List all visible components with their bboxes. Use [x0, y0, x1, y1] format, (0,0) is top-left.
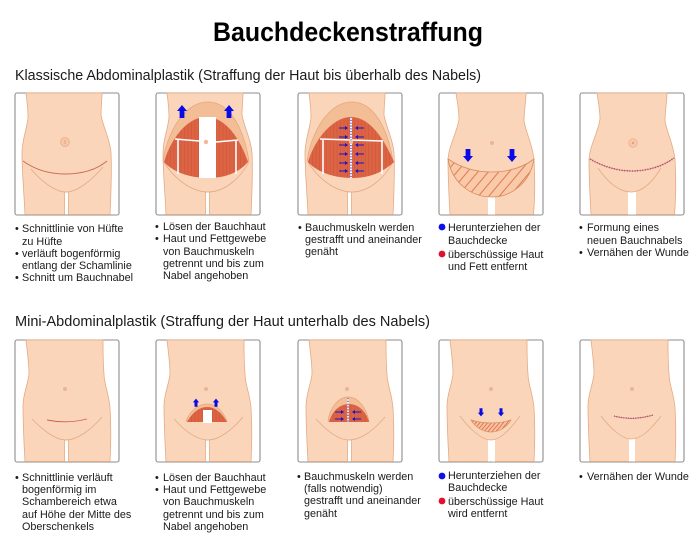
text: classic step 2: Lösen der Bauchhaut	[163, 221, 266, 233]
panel: mini step 4 excess skin removed	[439, 340, 543, 462]
text: classic step 4: und Fett entfernt	[448, 261, 527, 273]
text: classic step 2: •	[155, 221, 159, 233]
text: classic step 4	[439, 222, 543, 273]
text: classic step 2: von Bauchmuskeln	[163, 246, 254, 258]
text: mini step 4: überschüssige Haut	[448, 496, 543, 508]
text: classic step 3: gestrafft und aneinander	[305, 234, 422, 246]
text: classic step 3: genäht	[305, 246, 338, 258]
text: classic step 1: Schnitt um Bauchnabel	[22, 272, 133, 284]
text: classic step 1: verläuft bogenförmig	[22, 248, 120, 260]
text: mini step 2: Nabel angehoben	[163, 521, 248, 533]
text: classic step 5: Formung eines	[587, 222, 660, 234]
text: classic step 1: zu Hüfte	[22, 236, 62, 248]
text: mini step 1: Schambereich etwa	[22, 496, 117, 508]
text: classic step 5: •	[579, 222, 583, 234]
panel: mini step 1 incision	[15, 340, 119, 462]
text: classic step 1: •	[15, 272, 19, 284]
panel: classic step 2 lifting skin	[156, 93, 260, 215]
panel: mini step 2 lifting skin	[156, 340, 260, 462]
text: mini step 3: Bauchmuskeln werden	[304, 471, 413, 483]
panel: classic step 5 sutured wound	[580, 93, 684, 215]
text: classic step 3: •	[298, 222, 302, 234]
panel: classic step 3 muscles sutured	[298, 93, 402, 215]
text: mini step 3: gestrafft und aneinander	[304, 495, 421, 507]
text: classic step 5	[579, 222, 689, 259]
text: classic step 1: •	[15, 248, 19, 260]
text: mini step 1: Schnittlinie verläuft	[22, 472, 113, 484]
heading: classic abdominoplasty: Klassische Abdominalplastik (Straffung der Haut bis überhalb des Nabels)	[15, 67, 481, 84]
panel: mini step 5 sutured wound	[580, 340, 684, 462]
text: mini step 1: •	[15, 472, 19, 484]
panel: classic step 1 incision	[15, 93, 119, 215]
text: classic step 1	[15, 223, 133, 284]
text: classic step 1: entlang der Schamlinie	[22, 260, 132, 272]
text: mini step 2	[155, 472, 266, 533]
text: mini step 2: Haut und Fettgewebe	[163, 484, 266, 496]
text: mini step 5: Vernähen der Wunde	[587, 471, 689, 483]
text: classic step 4: Bauchdecke	[448, 235, 507, 247]
text: mini step 3: genäht	[304, 508, 337, 520]
text: mini step 1: bogenförmig im	[22, 484, 96, 496]
text: classic step 5: neuen Bauchnabels	[587, 235, 683, 247]
heading: mini abdominoplasty: Mini-Abdominalplastik (Straffung der Haut unterhalb des Nabels)	[15, 313, 430, 330]
panel: mini step 3 muscles sutured	[298, 340, 402, 462]
text: mini step 5: •	[579, 471, 583, 483]
text: mini step 3	[297, 471, 421, 520]
text: classic step 2: Haut und Fettgewebe	[163, 233, 266, 245]
text: mini step 1: Oberschenkels	[22, 521, 95, 533]
text: classic step 2: •	[155, 233, 159, 245]
text: mini step 2: •	[155, 472, 159, 484]
text: classic step 5: Vernähen der Wunde	[587, 247, 689, 259]
text: classic step 1: Schnittlinie von Hüfte	[22, 223, 123, 235]
text: classic step 2	[155, 221, 266, 282]
arrows: muscles pulled together	[335, 410, 361, 421]
text: mini step 4: wird entfernt	[447, 508, 507, 520]
text: mini step 1	[15, 472, 132, 533]
text: mini step 3: (falls notwendig)	[304, 483, 383, 495]
text: mini step 4	[439, 470, 543, 520]
arrows: muscles pulled together	[339, 126, 364, 173]
text: classic step 5: •	[579, 247, 583, 259]
text: mini step 4: Herunterziehen der	[448, 470, 541, 482]
text: mini step 2: von Bauchmuskeln	[163, 496, 254, 508]
text: classic step 2: Nabel angehoben	[163, 270, 248, 282]
text: mini step 1: auf Höhe der Mitte des	[22, 509, 132, 521]
text: classic step 4: Herunterziehen der	[448, 222, 541, 234]
text: mini step 2: getrennt und bis zum	[163, 509, 264, 521]
panel: classic step 4 excess skin removed	[439, 93, 543, 215]
text: mini step 3: •	[297, 471, 301, 483]
text: mini step 2: •	[155, 484, 159, 496]
title: Bauchdeckenstraffung	[213, 17, 483, 47]
text: classic step 3: Bauchmuskeln werden	[305, 222, 414, 234]
text: classic step 3	[298, 222, 422, 258]
text: classic step 4: überschüssige Haut	[448, 249, 543, 261]
text: classic step 1: •	[15, 223, 19, 235]
text: classic step 2: getrennt und bis zum	[163, 258, 264, 270]
text: mini step 2: Lösen der Bauchhaut	[163, 472, 266, 484]
text: mini step 4: Bauchdecke	[448, 482, 507, 494]
